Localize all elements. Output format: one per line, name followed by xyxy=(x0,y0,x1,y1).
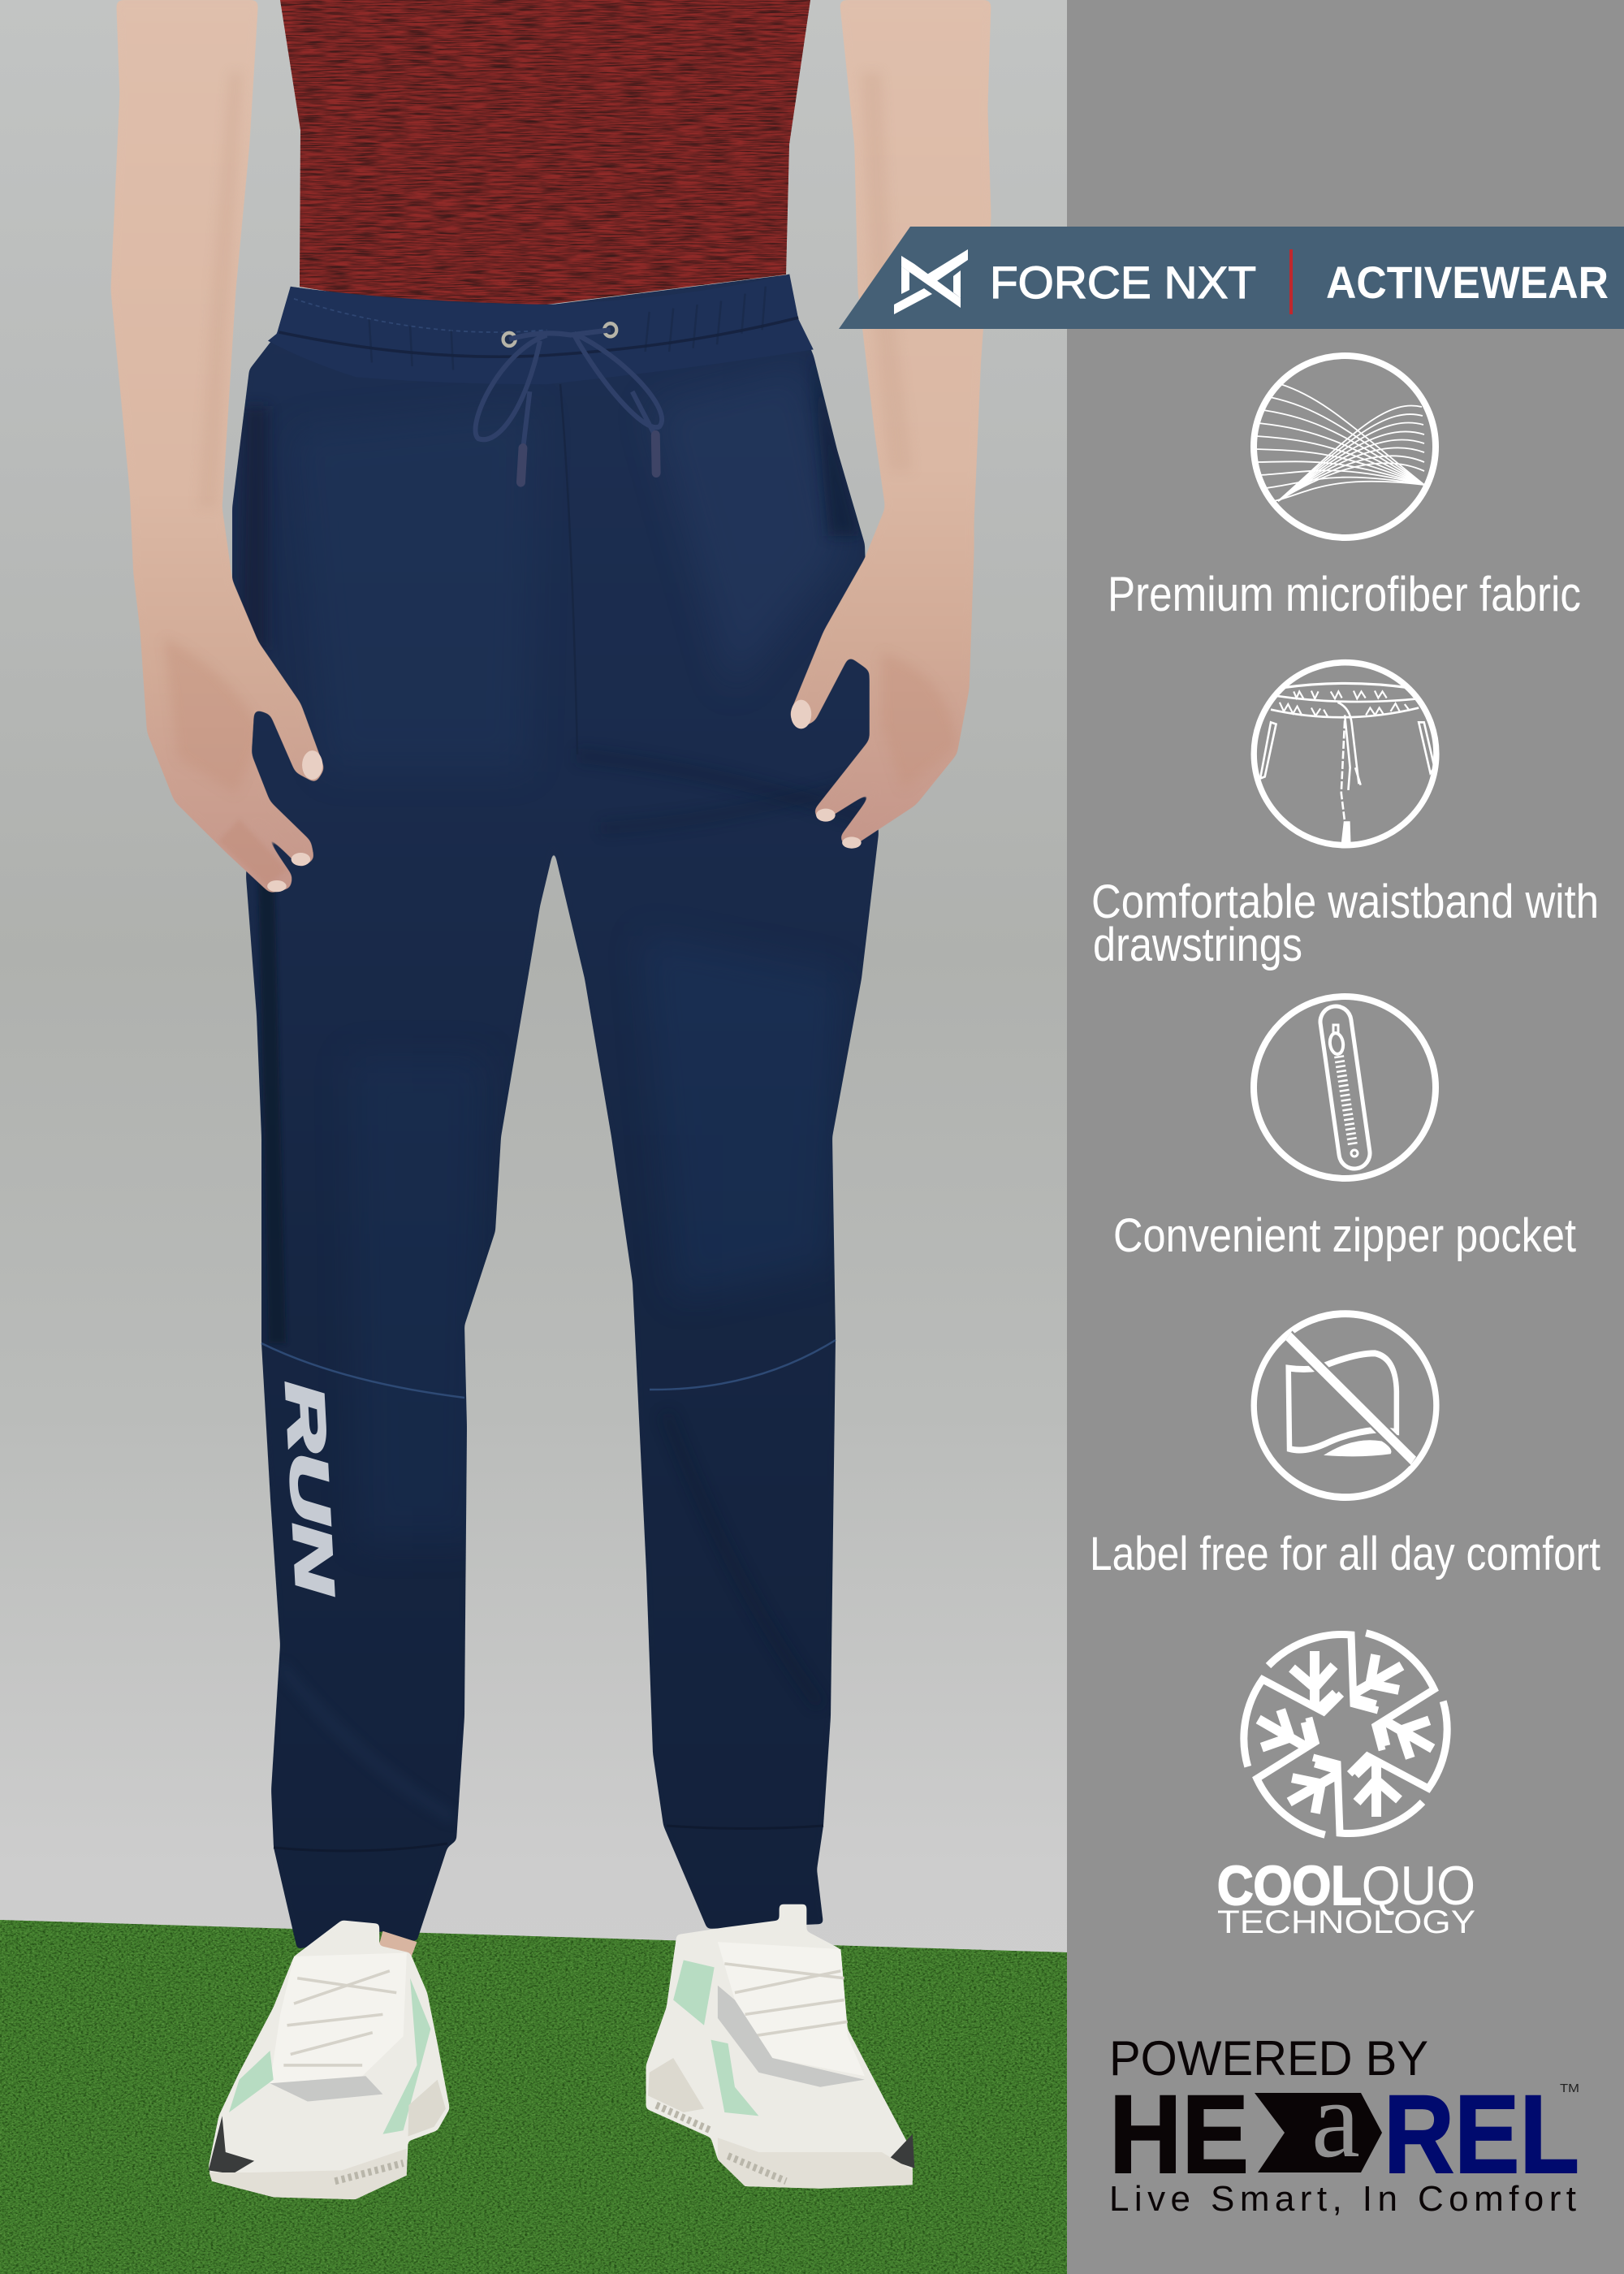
mint panels xyxy=(673,1960,758,2116)
icon: microfiber fabric xyxy=(1254,356,1436,538)
wordmark HE: HE xyxy=(1109,2073,1249,2197)
photo: studio background xyxy=(0,0,1067,2274)
photo: right sneaker xyxy=(646,1904,914,2189)
photo: artificial grass floor xyxy=(0,1920,1067,2274)
brand banner xyxy=(839,227,1624,329)
waistband xyxy=(268,275,814,384)
RUN print: RUN xyxy=(274,1380,346,1597)
sole xyxy=(209,2149,407,2199)
tagline: Live Smart, In Comfort xyxy=(1109,2179,1576,2219)
icon: Force NXT logo xyxy=(894,249,968,314)
red divider xyxy=(1289,249,1293,314)
photo: left sneaker xyxy=(209,1920,450,2199)
powered by caption: POWERED BY xyxy=(1109,2031,1428,2086)
photo: left arm and hand xyxy=(110,0,325,893)
sole xyxy=(718,2138,913,2189)
trademark: TM xyxy=(1560,2082,1579,2095)
hexagon letter a: a xyxy=(1311,2060,1360,2181)
photo: navy track pants xyxy=(232,275,879,1949)
icon: zipper pocket xyxy=(1254,996,1436,1178)
knuckle and forearm shading xyxy=(862,72,957,790)
upper and laces xyxy=(718,1942,865,2076)
sole ridges xyxy=(656,2105,786,2181)
panel: grey feature column xyxy=(1067,0,1624,2274)
feature text: waistband: drawstrings xyxy=(1093,919,1302,971)
logo: powered by Hexarel xyxy=(1109,2031,1579,2219)
finger nails xyxy=(267,750,322,892)
upper and laces xyxy=(270,1953,407,2083)
heel cutout xyxy=(408,2080,446,2136)
photo: red heathered t-shirt xyxy=(280,0,810,305)
wordmark REL: REL xyxy=(1384,2073,1579,2197)
heel cutout xyxy=(648,2058,704,2112)
sole ridges xyxy=(335,2163,404,2181)
photo: right arm and hand xyxy=(789,0,991,850)
hand and forearm shading xyxy=(164,72,287,884)
banner category: ACTIVEWEAR xyxy=(1326,257,1609,308)
mint panel xyxy=(229,1978,430,2134)
icon: waistband with drawstrings xyxy=(1254,663,1436,845)
logo: CoolQuo Technology: TECHNOLOGY xyxy=(1217,1904,1475,1940)
dark toe accent xyxy=(888,2134,914,2168)
finger nails xyxy=(791,700,862,849)
grey mesh xyxy=(270,2076,382,2102)
feature text: waistband xyxy=(1091,875,1599,971)
fabric highlights and fold shading xyxy=(240,349,869,1819)
grey panel xyxy=(718,1986,865,2087)
hexagon X xyxy=(1255,2093,1382,2172)
icon: label free xyxy=(1254,1314,1436,1498)
icon: CoolQuo snowflake xyxy=(1220,1617,1471,1851)
ankle cuffs xyxy=(274,1826,823,1851)
knee seams xyxy=(261,1340,836,1398)
dark toe cap xyxy=(209,2116,254,2174)
logo: CoolQuo Technology: COOLQUO xyxy=(1217,1855,1475,1917)
center front seam xyxy=(560,384,577,754)
photo: drawstring xyxy=(476,323,662,482)
brand name: FORCE NXT xyxy=(990,257,1256,308)
